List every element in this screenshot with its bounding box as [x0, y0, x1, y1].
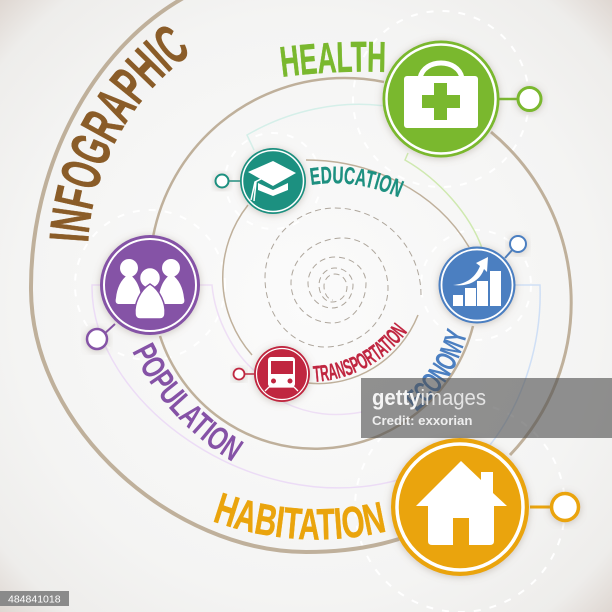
heading: TRANSPORTATION: TRANSPORTATION: [312, 322, 408, 382]
icon: habitation house: [391, 438, 578, 576]
dashed white halos: [75, 11, 565, 612]
spiral rings: [31, 0, 571, 552]
heading: EDUCATION: EDUCATION: [310, 166, 404, 198]
heading: POPULATION: POPULATION: [132, 342, 244, 462]
dashed central spiral: [265, 208, 421, 347]
watermark panel: Credit: exxorian: [372, 413, 472, 428]
icon: education graduation cap: [216, 148, 306, 214]
icon: economy growth chart: [438, 236, 526, 324]
image id tag: 484841018: [8, 594, 61, 606]
icon: health first aid kit: [382, 40, 541, 158]
heading: ECONOMY: ECONOMY: [406, 328, 466, 412]
watermark panel: gettyimages: [372, 385, 486, 410]
heading: HABITATION: HABITATION: [214, 492, 386, 540]
watermark panel: [361, 378, 612, 438]
title: INFOGRAPHIC: INFOGRAPHIC: [49, 26, 188, 241]
icon: transportation train: [234, 346, 310, 402]
heading: HEALTH: HEALTH: [280, 42, 385, 77]
pale connector arcs: [92, 104, 540, 488]
image id tag: [0, 591, 69, 606]
icon: population people: [87, 235, 200, 349]
